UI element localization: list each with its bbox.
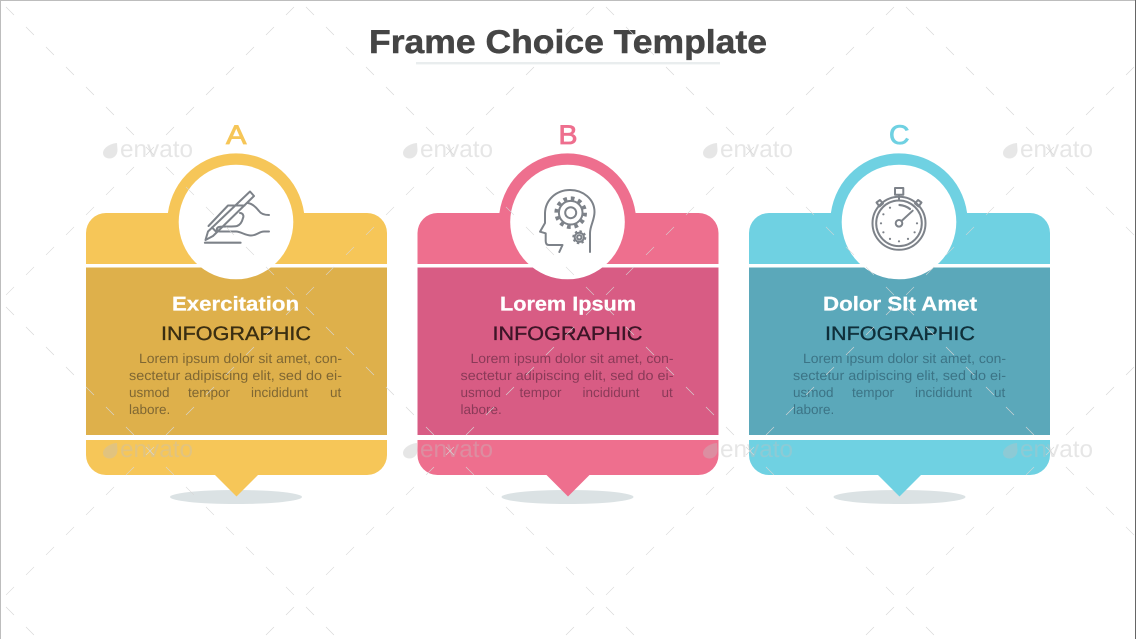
shadow B	[502, 490, 634, 504]
panel: B Lorem Ipsum	[418, 120, 718, 504]
body text A: tempor	[188, 385, 231, 400]
body text A: labore.	[129, 402, 170, 417]
watermark: envato logos: envato	[120, 436, 193, 463]
body text B: labore.	[460, 402, 502, 417]
watermark: envato logos: envato	[720, 436, 793, 463]
watermark: envato logos: envato	[120, 136, 193, 163]
icon circle C	[842, 165, 956, 279]
letter C: C	[889, 120, 910, 150]
title: Frame Choice Template	[369, 23, 767, 60]
body text A: sectetur adipiscing elit, sed do ei-	[129, 368, 342, 383]
top band C	[749, 153, 1050, 264]
body text A	[129, 351, 342, 417]
heading C: Dolor SIt Amet	[823, 294, 977, 316]
subheading B: INFOGRAPHIC	[492, 323, 642, 345]
body text B: incididunt	[582, 385, 640, 400]
body text B: sectetur adipiscing elit, sed do ei-	[460, 368, 674, 383]
watermark: envato logos: envato	[1020, 136, 1093, 163]
watermark: envato logos: envato	[1020, 436, 1093, 463]
shadow A	[170, 490, 302, 504]
body text B: usmod	[460, 385, 501, 400]
icon circle A	[179, 165, 293, 279]
middle band B	[418, 268, 718, 435]
title underline	[416, 62, 720, 64]
middle band A	[86, 268, 387, 435]
icon: stopwatch	[872, 188, 926, 250]
top band B	[418, 153, 718, 264]
watermark: envato logos: envato	[420, 136, 493, 163]
panel: A Exercitation	[86, 120, 387, 504]
bottom pointer band A	[86, 440, 387, 496]
body text A: Lorem ipsum dolor sit amet, con-	[139, 351, 342, 366]
icon circle B	[510, 165, 625, 279]
body text C: ut	[994, 385, 1006, 400]
bottom pointer band B	[418, 440, 718, 496]
body text C: tempor	[852, 385, 895, 400]
letter B: B	[558, 120, 578, 150]
body text C: incididunt	[915, 385, 972, 400]
subheading C: INFOGRAPHIC	[825, 323, 975, 345]
body text B: ut	[662, 385, 673, 400]
body text B	[460, 351, 674, 417]
icon: hand writing with pencil	[205, 192, 269, 243]
letter A: A	[226, 120, 246, 150]
body text A: usmod	[129, 385, 170, 400]
bottom pointer band C	[749, 440, 1050, 496]
body text C: Lorem ipsum dolor sit amet, con-	[803, 351, 1006, 366]
heading B: Lorem Ipsum	[500, 294, 636, 316]
middle band C	[749, 268, 1050, 435]
body text B: tempor	[520, 385, 562, 400]
top band A	[86, 153, 387, 264]
subheading A: INFOGRAPHIC	[161, 323, 311, 345]
watermark: envato logos: envato	[720, 136, 793, 163]
body text B: Lorem ipsum dolor sit amet, con-	[470, 351, 674, 366]
body text A: ut	[330, 385, 342, 400]
body text A: incididunt	[251, 385, 308, 400]
heading A: Exercitation	[172, 294, 299, 316]
shadow C	[834, 490, 966, 504]
body text C: labore.	[793, 402, 834, 417]
watermark: envato logos	[103, 136, 1093, 463]
panel: C Dolor Sit Amet	[749, 120, 1050, 504]
body text C: usmod	[793, 385, 834, 400]
body text C	[793, 351, 1006, 417]
body text C: sectetur adipiscing elit, sed do ei-	[793, 368, 1006, 383]
icon: head with gears	[540, 190, 594, 252]
watermark: envato logos: envato	[420, 436, 493, 463]
